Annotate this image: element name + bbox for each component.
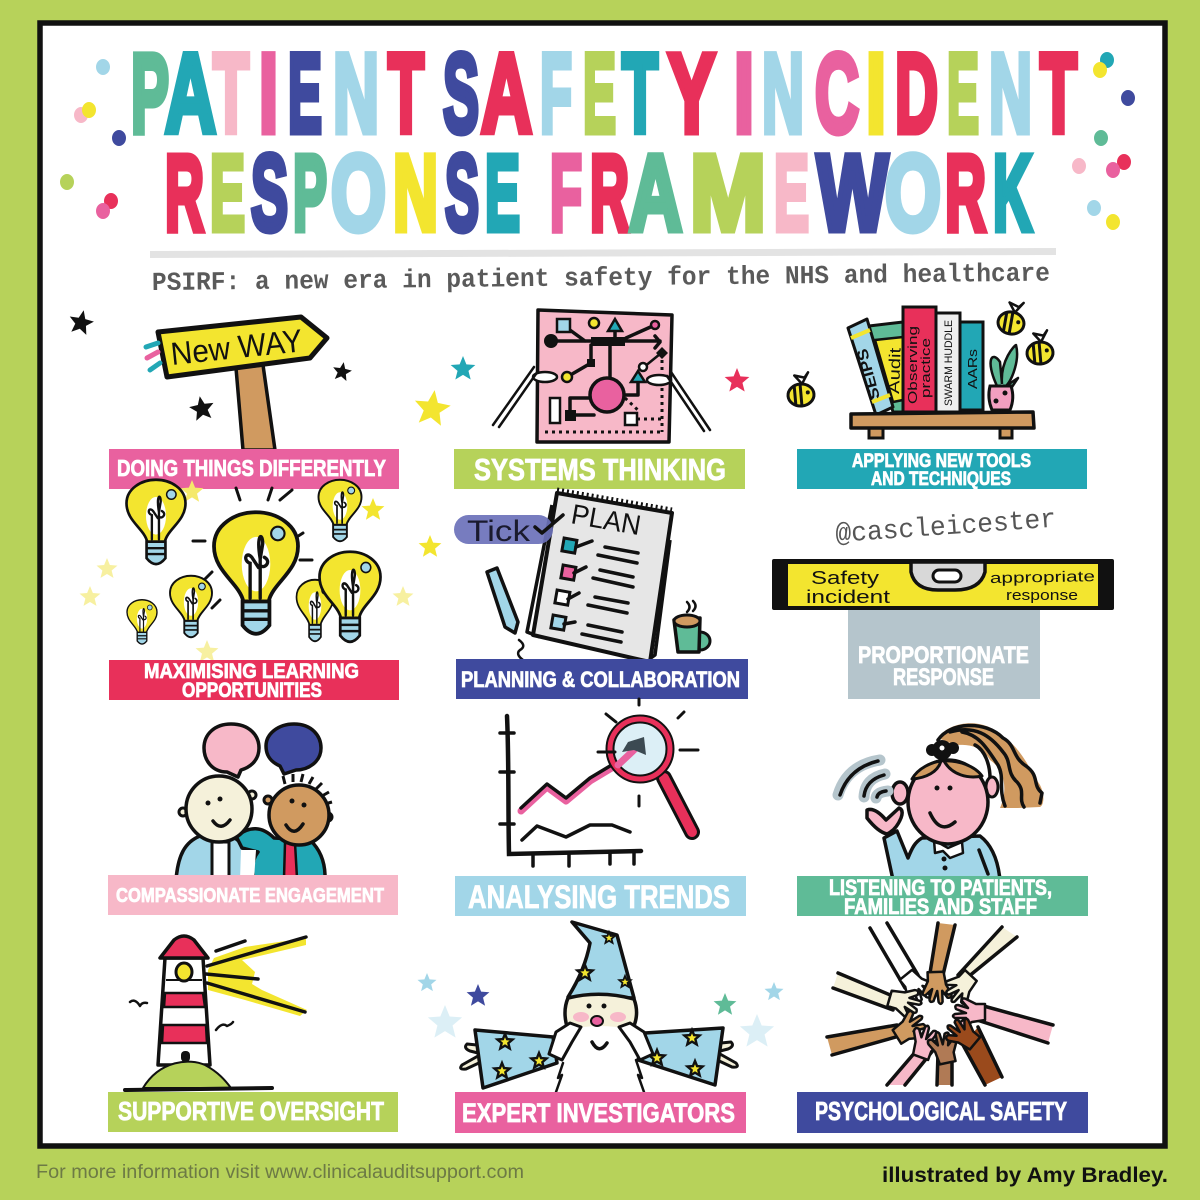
icon: woman head <box>892 740 998 844</box>
title: E <box>583 31 616 156</box>
icon: stars <box>418 973 784 1047</box>
icon: systems map <box>493 310 710 442</box>
icon: woman body <box>884 831 1000 880</box>
label <box>797 875 1088 919</box>
title: S <box>445 132 479 253</box>
label: DOING THINGS DIFFERENTLY <box>117 455 386 481</box>
title: T <box>213 31 249 156</box>
title: T <box>622 31 658 156</box>
icon: tick pill <box>454 515 563 548</box>
icon: bookshelf <box>848 307 1034 438</box>
label: PSYCHOLOGICAL SAFETY <box>815 1096 1067 1126</box>
icon: spirit level: Safety <box>811 568 879 588</box>
icon: bookshelf: Audit <box>886 347 905 394</box>
icon: circle of hands <box>827 923 1053 1085</box>
icon: light bulbs <box>126 480 380 644</box>
title: K <box>993 132 1032 253</box>
icon: signpost: New WAY <box>169 322 304 372</box>
label: ANALYSING TRENDS <box>468 879 730 915</box>
title: A <box>481 31 532 156</box>
label <box>456 659 748 699</box>
icon: notepad: PLAN <box>569 498 643 541</box>
icon: wizard <box>461 922 737 1100</box>
icon: wizard face <box>565 994 637 1030</box>
panel: supportive oversight <box>108 936 398 1132</box>
icon: wizard hat <box>568 922 634 998</box>
panel: expert investigators <box>418 922 784 1133</box>
label <box>108 875 398 915</box>
label: SYSTEMS THINKING <box>474 452 726 487</box>
title: R <box>165 132 204 253</box>
panel: doing things differently <box>67 308 399 489</box>
panel: analysing trends <box>455 699 746 916</box>
icon: bookshelf: SWARM HUDDLE <box>943 320 955 406</box>
icon: signpost <box>146 317 327 450</box>
label: FAMILIES AND STAFF <box>844 894 1037 919</box>
title: F <box>550 132 582 253</box>
icon: notepad <box>527 490 672 662</box>
footer: illustrator credit: illustrated by Amy Bradley. <box>882 1164 1168 1187</box>
label: COMPASSIONATE ENGAGEMENT <box>116 885 384 907</box>
title: F <box>540 31 572 156</box>
panel: systems thinking <box>412 310 749 489</box>
title: I <box>259 31 278 156</box>
handle text: @cascleicester <box>835 506 1057 551</box>
icon: black stars <box>67 308 353 422</box>
label: RESPONSE <box>893 664 994 691</box>
label <box>797 1092 1088 1133</box>
icon: spirit level <box>772 559 1114 610</box>
title: S <box>251 132 288 253</box>
title: I <box>866 31 886 156</box>
panel: compassionate engagement <box>108 724 398 915</box>
title: E <box>210 132 245 253</box>
title: Y <box>668 31 714 156</box>
icon: pale stars <box>80 480 413 662</box>
title: E <box>288 31 322 156</box>
label: PROPORTIONATE <box>858 642 1029 669</box>
title: O <box>331 132 386 253</box>
label: APPLYING NEW TOOLS <box>852 451 1031 472</box>
icon: sound waves <box>838 760 888 798</box>
label: PLANNING & COLLABORATION <box>461 667 740 692</box>
icon: two people <box>176 829 325 880</box>
icon: heads <box>179 774 332 845</box>
title: P <box>131 31 169 156</box>
icon: yellow star <box>419 535 441 557</box>
line chart <box>500 716 641 866</box>
icon: wizard beard <box>549 1016 653 1100</box>
icon: bookshelf: SEIPS <box>854 347 884 401</box>
title: I <box>734 31 754 156</box>
title: P <box>293 132 327 253</box>
label <box>797 449 1087 490</box>
label: LISTENING TO PATIENTS, <box>829 875 1052 900</box>
icon: pencil <box>487 568 523 660</box>
title underline <box>150 248 1056 258</box>
title: M <box>690 132 766 253</box>
footer: more information: For more information visit www.clinicalauditsupport.com <box>36 1162 524 1183</box>
title: N <box>393 132 438 253</box>
title: W <box>817 132 888 253</box>
icon: spirit level: response <box>1006 587 1078 604</box>
icon: coloured stars <box>412 356 749 427</box>
label: MAXIMISING LEARNING <box>144 660 359 683</box>
panel: planning and collaboration <box>419 490 748 699</box>
icon: hand <box>867 808 902 834</box>
label <box>109 660 399 702</box>
title: E <box>774 132 809 253</box>
icon: spirit level: incident <box>806 587 890 607</box>
title: O <box>885 132 941 253</box>
icon: speech bubbles <box>204 724 321 777</box>
icon: ponytail hair <box>938 723 1043 808</box>
title: T <box>388 31 424 156</box>
label: EXPERT INVESTIGATORS <box>462 1098 735 1128</box>
title: R <box>590 132 629 253</box>
title: N <box>333 31 379 156</box>
icon: tick pill: Tick <box>467 515 531 548</box>
icon: wizard sleeves <box>475 1028 723 1088</box>
label: OPPORTUNITIES <box>182 679 322 702</box>
title: C <box>815 31 859 156</box>
panel: listening <box>797 723 1088 919</box>
title: N <box>989 31 1032 156</box>
title: R <box>945 132 986 253</box>
icon: bookshelf: practice <box>918 338 933 398</box>
label <box>455 1092 746 1133</box>
icon: magnifying glass <box>598 699 698 832</box>
icon: spirit level: appropriate <box>990 568 1095 587</box>
label <box>848 610 1040 699</box>
icon: lighthouse <box>158 936 210 1065</box>
icon: bees <box>786 299 1054 407</box>
title: T <box>1040 31 1077 156</box>
label <box>109 449 399 489</box>
panel: proportionate response <box>772 559 1114 699</box>
title: D <box>895 31 938 156</box>
title <box>131 31 1077 253</box>
icon: bookshelf: AARs <box>965 348 980 389</box>
subtitle: PSIRF: a new era in patient safety for the NHS and healthcare <box>152 259 1050 298</box>
title: N <box>762 31 804 156</box>
title: E <box>947 31 979 156</box>
icon: hill <box>125 1051 272 1090</box>
title: A <box>165 31 216 156</box>
label: SUPPORTIVE OVERSIGHT <box>118 1096 384 1126</box>
title: E <box>485 132 520 253</box>
panel: applying new tools and techniques <box>786 299 1087 490</box>
icon: light beams <box>206 937 307 1016</box>
panel: psychological safety <box>797 923 1088 1133</box>
panel: maximising learning <box>80 480 413 702</box>
icon: mug <box>674 601 710 652</box>
title: A <box>629 132 682 253</box>
icon: wizard fingers <box>461 1042 737 1069</box>
icon: birds <box>130 1001 233 1030</box>
label: AND TECHNIQUES <box>871 469 1011 490</box>
confetti dots <box>60 52 1135 230</box>
label <box>108 1092 398 1132</box>
icon: bookshelf: Observing <box>905 326 920 404</box>
title: S <box>443 31 479 156</box>
